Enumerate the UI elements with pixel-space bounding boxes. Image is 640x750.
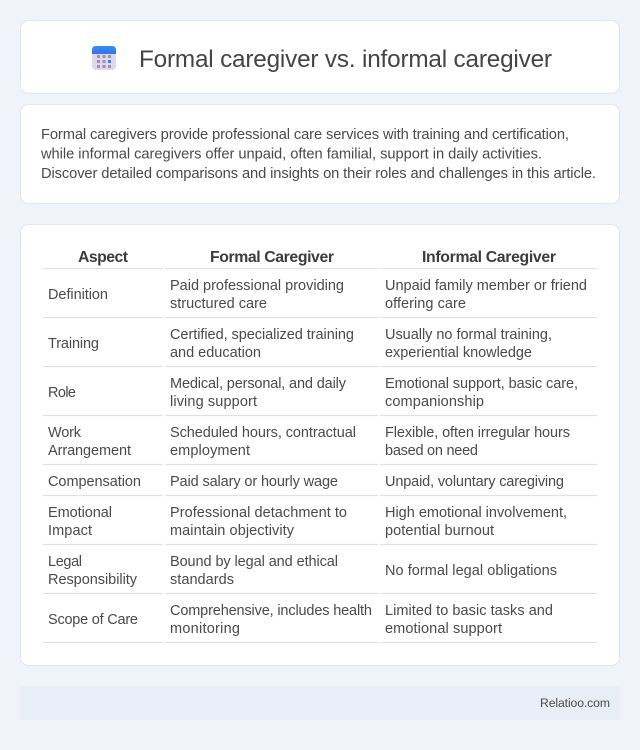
row: scope of care: emotional support xyxy=(385,621,502,637)
row: legal responsibility: Responsibility xyxy=(48,572,138,588)
footer xyxy=(20,686,620,720)
footer: Relatioo.com xyxy=(540,696,610,710)
row: training xyxy=(48,327,552,361)
row: emotional impact: Impact xyxy=(48,523,92,539)
row: emotional impact xyxy=(48,505,567,539)
intro text: while informal caregivers offer unpaid, often familial, support in daily activities. xyxy=(40,146,542,162)
table header: Informal Caregiver xyxy=(422,249,556,266)
row: role xyxy=(48,376,578,410)
row: legal responsibility: Legal xyxy=(48,554,82,570)
row: scope of care: Comprehensive, includes health xyxy=(170,603,372,619)
row: role: companionship xyxy=(385,394,484,410)
table header: Formal Caregiver xyxy=(210,249,334,266)
row: compensation: Paid salary or hourly wage xyxy=(170,474,338,490)
row: training: and education xyxy=(170,345,261,361)
row: legal responsibility: Bound by legal and ethical xyxy=(170,554,338,570)
row: training: Certified, specialized training xyxy=(170,327,354,343)
table header xyxy=(78,249,556,266)
row: emotional impact: Professional detachment to xyxy=(170,505,347,521)
row: emotional impact: maintain objectivity xyxy=(170,523,295,539)
row: scope of care: Scope of Care xyxy=(48,612,138,628)
row: emotional impact: High emotional involvement, xyxy=(385,505,567,521)
icon: calendar xyxy=(92,46,116,70)
panel: introduction xyxy=(20,104,620,204)
row: emotional impact: potential burnout xyxy=(385,523,494,539)
row: role: Emotional support, basic care, xyxy=(385,376,578,392)
intro text xyxy=(40,127,596,182)
row: work arrangement xyxy=(48,425,570,459)
row: definition xyxy=(48,278,587,312)
intro text: Discover detailed comparisons and insights on their roles and challenges in this article. xyxy=(41,166,596,182)
panel: title xyxy=(20,20,620,94)
row: scope of care xyxy=(48,603,553,637)
table header: Aspect xyxy=(78,249,129,266)
panel: comparison table xyxy=(20,224,620,666)
row: role: living support xyxy=(170,394,257,410)
row: emotional impact: Emotional xyxy=(48,505,112,521)
row: role: Medical, personal, and daily xyxy=(170,376,347,392)
row: compensation: Compensation xyxy=(48,474,141,490)
row: work arrangement: Scheduled hours, contractual xyxy=(170,425,356,441)
row: work arrangement: Arrangement xyxy=(48,443,131,459)
row: definition: Unpaid family member or friend xyxy=(385,278,587,294)
row: definition: structured care xyxy=(170,296,267,312)
row: legal responsibility: No formal legal obligations xyxy=(385,563,557,579)
row: scope of care: monitoring xyxy=(170,621,240,637)
intro text: Formal caregivers provide professional care services with training and certification, xyxy=(41,127,569,143)
row: definition: Definition xyxy=(48,287,108,303)
row: training: experiential knowledge xyxy=(385,345,532,361)
row: work arrangement: Flexible, often irregular hours xyxy=(385,425,570,441)
row: work arrangement: employment xyxy=(170,443,250,459)
row: compensation xyxy=(48,474,564,490)
row: legal responsibility: standards xyxy=(170,572,234,588)
row: training: Usually no formal training, xyxy=(385,327,552,343)
row: role: Role xyxy=(48,385,76,401)
row: definition: offering care xyxy=(385,296,466,312)
heading: Formal caregiver vs. informal caregiver xyxy=(139,46,552,73)
row: legal responsibility xyxy=(48,554,557,588)
row: training: Training xyxy=(48,336,99,352)
row: definition: Paid professional providing xyxy=(170,278,344,294)
row: compensation: Unpaid, voluntary caregiving xyxy=(385,474,564,490)
row: work arrangement: based on need xyxy=(385,443,478,459)
row: work arrangement: Work xyxy=(48,425,82,441)
row: scope of care: Limited to basic tasks and xyxy=(385,603,553,619)
